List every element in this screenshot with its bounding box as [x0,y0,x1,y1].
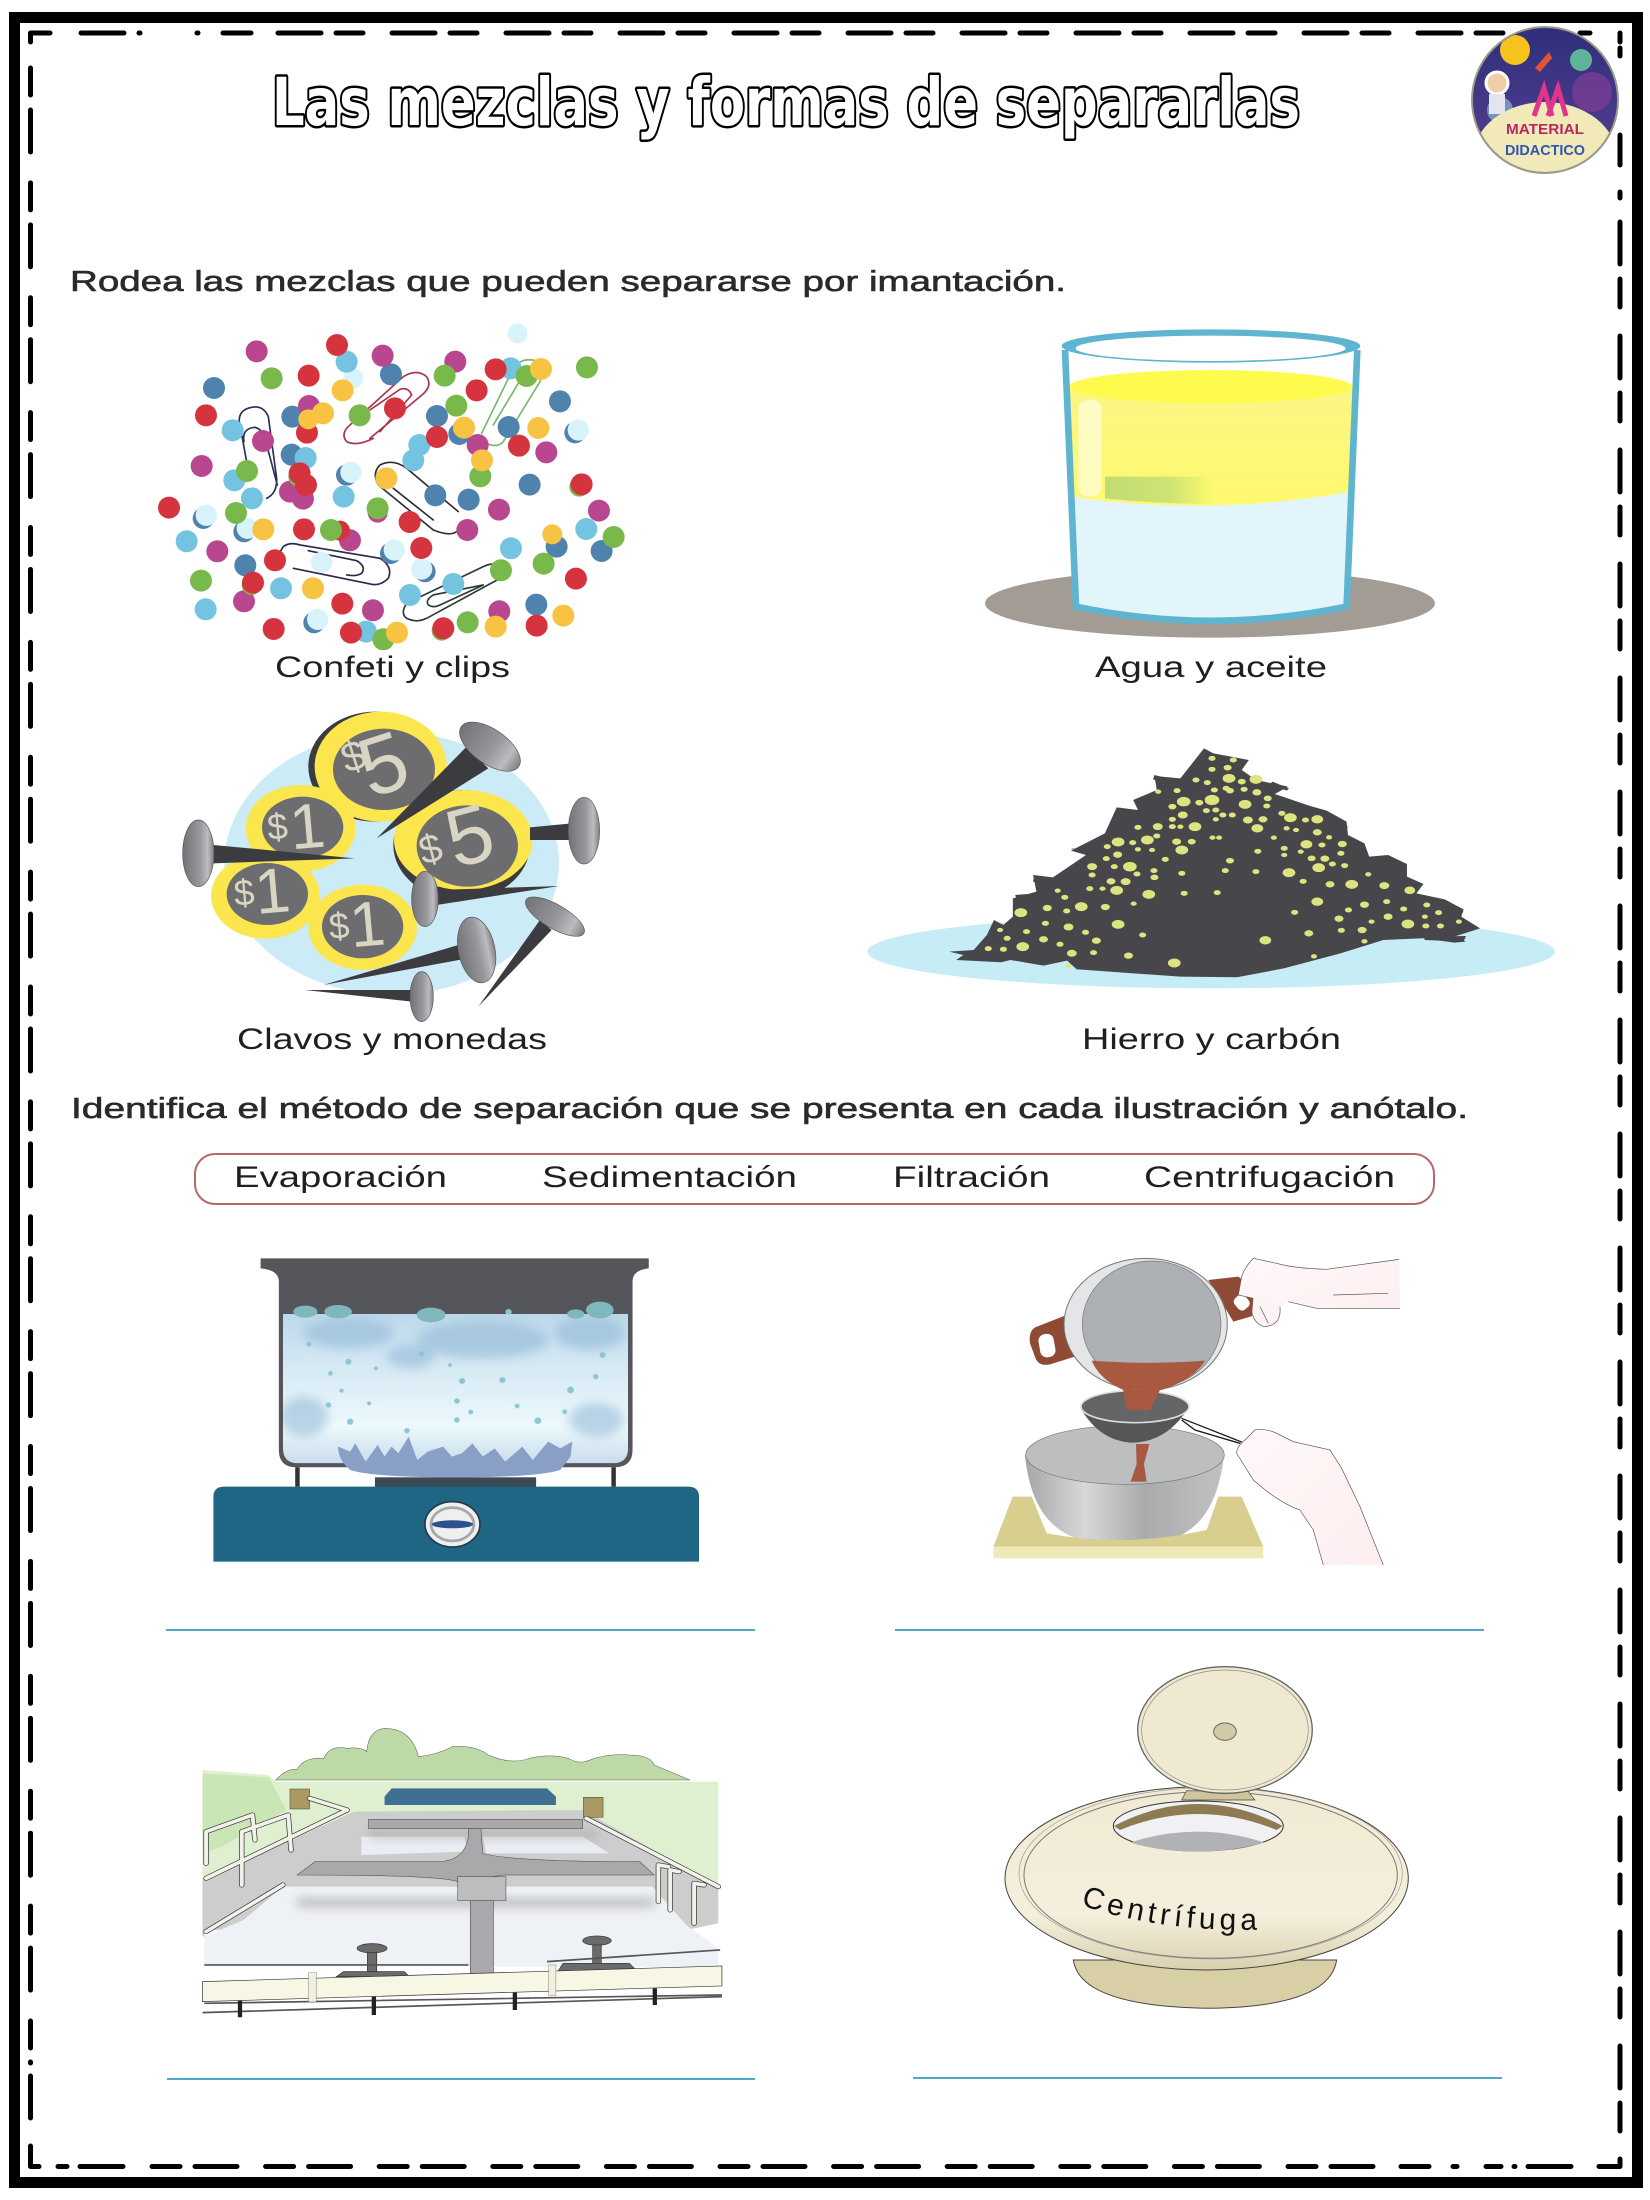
opening [1113,1801,1283,1852]
trees [276,1728,690,1780]
pan [1064,1258,1227,1390]
strainer [1081,1390,1253,1447]
coin: $1 upper left: $ [265,805,289,848]
glass outline [1062,329,1360,621]
coin: $5 top: 5 [347,713,420,815]
iron filings [986,757,1461,967]
base [1073,1960,1337,2008]
illustration: filtration pouring [993,1258,1400,1565]
nails [183,712,600,1022]
coin: $1 upper left: 1 [287,790,328,863]
concrete channels [297,1819,654,1974]
glass body [1065,350,1357,621]
logo: Material Didáctico [1471,26,1619,174]
water surfaces [361,1837,609,1855]
coin: $5 right [393,786,533,900]
heading: imantación: Rodea las mezclas que pueden separarse por imantación. [70,266,1066,298]
logo: Material Didáctico: DIDACTICO [1505,142,1585,159]
coin: $5 top: $ [335,730,371,782]
illustration: confetti and clips [158,323,625,650]
water [280,1314,628,1464]
word: Sedimentación: Sedimentación [542,1161,797,1194]
word: Evaporación: Evaporación [234,1161,447,1194]
coin: $5 right: $ [414,825,447,874]
pale blue ground [867,915,1555,988]
coin: $1 lower left: 1 [252,855,293,928]
illustration: sedimentation tanks [202,1728,722,2017]
illustration: centrifuge [1004,1666,1409,2009]
pipe brackets and posts [240,1965,655,2017]
background disc [224,732,559,995]
label: Agua y aceite: Agua y aceite [1095,651,1327,684]
front rails [202,1950,722,2013]
burner plate [375,1477,536,1487]
grass [202,1770,718,1890]
illustration: pile of iron and coal [867,748,1555,988]
basin [1025,1426,1224,1543]
coin: $1 lower left [211,853,320,939]
body [1005,1787,1408,1970]
board behind basin [993,1497,1263,1547]
coin: $1 lower centre: $ [327,905,351,947]
flame [338,1437,572,1477]
label on centrifuge: Centrífuga [1084,1888,1258,1936]
ground [202,1810,718,1937]
pan handles [1030,1277,1267,1365]
answer line 4 [913,2077,1502,2079]
coal mound [949,748,1480,977]
illustration: nails and coins [183,712,600,1022]
label: Hierro y carbón: Hierro y carbón [1082,1023,1341,1056]
answer line 2 [895,1629,1484,1631]
burner legs [297,1467,614,1487]
burner knob [425,1502,480,1547]
oil [1069,387,1353,506]
coin: $5 top [308,712,447,822]
word: Centrifugación: Centrifugación [1144,1161,1395,1194]
coin: $1 lower centre [308,885,417,970]
burner base [213,1487,699,1562]
label: Confeti y clips: Confeti y clips [275,651,510,684]
word bank box [195,1154,1434,1204]
word: Filtración: Filtración [893,1161,1050,1194]
lower hand [1237,1430,1383,1565]
illustration: evaporation pot on burner [213,1258,699,1562]
heading: método de separación: Identifica el método de separación que se presenta en cada ilustración y anótalo. [71,1093,1468,1125]
coin: $1 lower centre: 1 [347,888,388,961]
answer line 3 [167,2078,755,2080]
big pipe [202,1966,722,2002]
title: Las mezclas y formas de separarlas [272,64,1300,141]
lid [1138,1667,1312,1793]
label: Clavos y monedas: Clavos y monedas [237,1023,547,1056]
coin: $1 upper left [246,785,356,872]
pipes [206,1798,718,1932]
barrels [290,1789,603,1817]
illustration: glass of water and oil [985,329,1435,638]
water [1072,490,1352,622]
paper clips [239,360,541,621]
confetti dots [158,323,625,650]
blue building [385,1788,556,1805]
bubbles [293,1302,614,1433]
upper hand [1238,1258,1400,1327]
glass shadow [985,569,1435,638]
coal shards [1015,775,1466,942]
filtered stream [1131,1444,1149,1482]
valves [336,1936,634,1977]
hinge [1182,1791,1255,1800]
coin: $1 lower left: $ [232,871,256,914]
logo: Material Didáctico: MATERIAL [1506,121,1584,138]
pot [261,1258,649,1467]
answer line 1 [166,1629,755,1631]
coin: $5 right: 5 [436,786,503,886]
